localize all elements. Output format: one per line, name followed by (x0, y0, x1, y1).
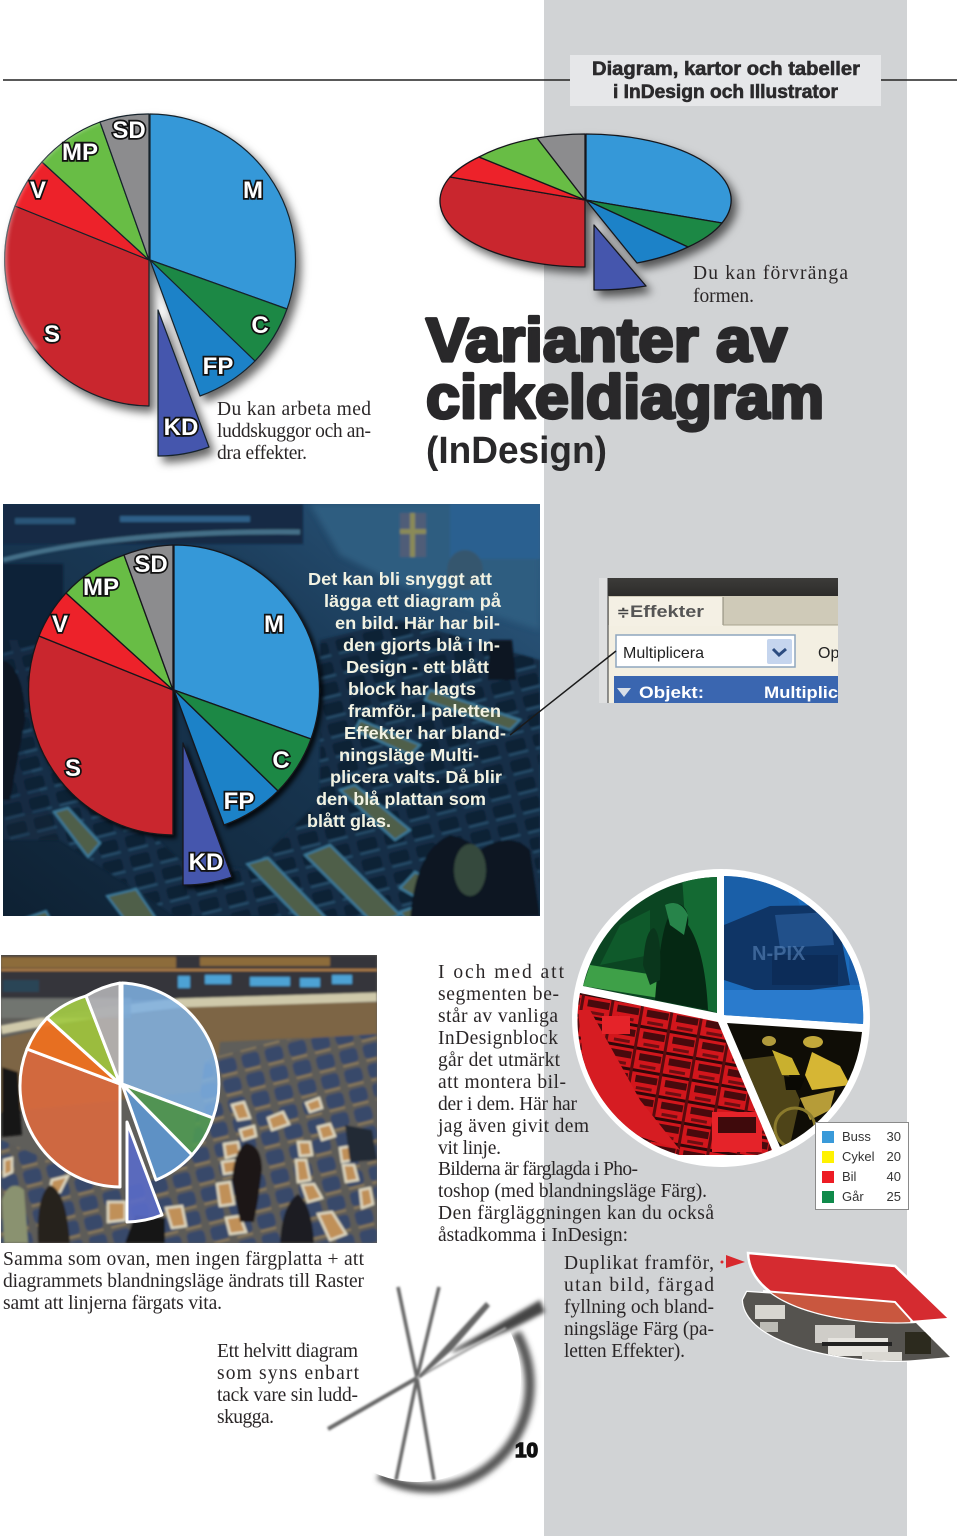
effects palette screenshot: Multiplic (764, 683, 838, 702)
text on photo: en bild. Här har bil- (335, 613, 500, 633)
leader line (510, 651, 616, 735)
main title: (InDesign) (426, 430, 607, 472)
text on photo: block har lagts (348, 679, 476, 699)
text on photo: den gjorts blå i In- (343, 635, 500, 655)
pie labels: C (251, 312, 269, 339)
text on photo (307, 569, 506, 831)
effects palette screenshot: Objekt: (639, 683, 704, 702)
body text: segments: toshop (med blandningsläge Färg). (438, 1181, 707, 1202)
header box: i InDesign och Illustrator (613, 82, 839, 103)
text on photo: blått glas. (307, 811, 391, 831)
body text: segments: vit linje. (438, 1138, 501, 1159)
pie labels on photo: FP (224, 788, 254, 815)
exploded slice shadow (452, 1300, 545, 1353)
body text: duplicate (564, 1253, 714, 1362)
photo: seats (1, 1034, 377, 1243)
pie labels on photo: S (65, 755, 81, 782)
body text: segments: att montera bil- (438, 1072, 566, 1093)
segment: bicycle (727, 1023, 862, 1147)
text on photo: lägga ett diagram på (324, 591, 501, 611)
body text: segments: Bilderna är färglagda i Pho- (438, 1159, 638, 1180)
body text: duplicate: fyllning och bland- (564, 1297, 714, 1318)
body text: duplicate: Duplikat framför, (564, 1253, 714, 1274)
grey column (544, 0, 907, 1536)
body text: segments: Den färgläggningen kan du också (438, 1203, 714, 1224)
body text: segments: går det utmärkt (438, 1050, 561, 1071)
body text: segments: I och med att (438, 962, 565, 983)
pie labels on photo: V (52, 611, 68, 638)
body text: duplicate: ningsläge Färg (pa- (564, 1319, 714, 1340)
legend: bil: Bil (842, 1169, 857, 1184)
effects palette screenshot: Effekter (630, 602, 704, 621)
photo: ledge (1, 997, 377, 1030)
pie chart on photo (29, 545, 320, 885)
body text: segments (437, 962, 714, 1246)
pie labels on photo: KD (189, 849, 223, 876)
caption: shadows: dra effekter. (217, 443, 307, 464)
photo: people (2, 1067, 377, 1243)
legend: cykel: Cykel (842, 1149, 875, 1164)
photo: desks (4, 1098, 373, 1240)
main title (426, 306, 824, 472)
caption: shadows (217, 399, 371, 464)
legend (816, 1122, 908, 1210)
body text: segments: der i dem. Här har (438, 1094, 578, 1115)
legend: buss (822, 1129, 901, 1144)
photo: balcony band (1, 955, 377, 1000)
legend: bil (822, 1169, 901, 1184)
body text: segments: InDesignblock (438, 1028, 558, 1049)
header box: Diagram, kartor och tabeller (592, 59, 861, 80)
segment: pedestrian (580, 875, 720, 1017)
body text: segments: åstadkomma i InDesign: (438, 1225, 628, 1246)
caption: shadows: luddskuggor och an- (217, 421, 371, 442)
body text: segments: segmenten be- (438, 984, 559, 1005)
body text: segments: står av vanliga (438, 1006, 558, 1027)
white disc (313, 1274, 521, 1482)
legend: buss: Buss (842, 1129, 871, 1144)
photo panel: parliament with raster pie (1, 955, 377, 1243)
photo pie with white border (570, 869, 870, 1167)
legend: går (822, 1189, 901, 1204)
caption: distort (693, 263, 848, 307)
pie labels on photo: M (264, 611, 284, 638)
text on photo: Effekter har bland- (344, 723, 506, 743)
header box (570, 55, 881, 106)
text on photo: ningsläge Multi- (339, 745, 479, 765)
pie labels on photo (52, 551, 290, 876)
pie chart with soft shadow (4, 114, 295, 456)
pie labels: SD (112, 117, 146, 144)
segment: bus: N-PIX (752, 943, 806, 965)
caption: all white pie: skugga. (217, 1407, 274, 1428)
text on photo: framför. I paletten (348, 701, 501, 721)
text on photo: Design - ett blått (346, 657, 489, 677)
caption: shadows: Du kan arbeta med (217, 399, 371, 420)
photo panel: blue tinted parliament (3, 504, 540, 940)
caption: distort: Du kan förvränga (693, 263, 848, 284)
pie labels: S (44, 321, 60, 348)
solid red slice (748, 1253, 950, 1325)
caption: raster: diagrammets blandningsläge ändrats till Raster (3, 1271, 364, 1292)
effects palette screenshot: Multiplicera (623, 645, 704, 662)
rim highlight (4, 120, 100, 350)
legend: går: Går (842, 1189, 864, 1204)
photo: desks (14, 690, 520, 940)
photo: people (3, 640, 540, 920)
photo: seating rows (3, 620, 540, 916)
photo: wall and flag (310, 504, 540, 630)
raster pie segments (20, 983, 219, 1222)
photo: balcony (3, 504, 303, 814)
pie labels on photo: MP (83, 574, 119, 601)
caption: raster (3, 1249, 365, 1314)
main title: cirkeldiagram (426, 363, 824, 431)
gap shadows (328, 1287, 506, 1480)
effects palette screenshot: Op (818, 645, 839, 662)
caption: raster: Samma som ovan, men ingen färgplatta + att (3, 1249, 365, 1270)
caption: all white pie: tack vare sin ludd- (217, 1385, 358, 1406)
text on photo: plicera valts. Då blir (330, 767, 502, 787)
legend: cykel (822, 1149, 901, 1164)
body text: duplicate: letten Effekter). (564, 1341, 685, 1362)
main title: Varianter av (426, 306, 787, 374)
arrow marker (720, 1255, 745, 1268)
legend: går: 25 (887, 1189, 901, 1204)
effects palette screenshot (599, 578, 839, 703)
caption: all white pie (217, 1341, 360, 1428)
pie labels: KD (164, 414, 198, 441)
text on photo: den blå plattan som (316, 789, 486, 809)
pie labels: MP (62, 139, 98, 166)
text on photo: Det kan bli snyggt att (308, 569, 492, 589)
header rule (3, 79, 957, 81)
segment: bus (724, 876, 864, 1024)
pie labels on photo: SD (134, 551, 168, 578)
legend: cykel: 20 (887, 1149, 901, 1164)
body text: duplicate: utan bild, färgad (564, 1275, 714, 1296)
legend: buss: 30 (887, 1129, 901, 1144)
pie labels on photo: C (272, 747, 290, 774)
body text: segments: jag även givit dem (437, 1116, 589, 1137)
caption: raster: samt att linjerna färgats vita. (3, 1293, 222, 1314)
outer shadow (379, 1333, 530, 1488)
caption: distort: formen. (693, 286, 754, 307)
pie labels: V (30, 177, 46, 204)
pie labels: FP (203, 353, 233, 380)
pie labels: M (243, 177, 263, 204)
caption: all white pie: som syns enbart (217, 1363, 360, 1384)
caption: all white pie: Ett helvitt diagram (217, 1341, 358, 1362)
pie labels (30, 117, 269, 441)
all white pie with shadow only (313, 1274, 545, 1488)
page number: 10 (515, 1440, 538, 1462)
exploded slice example (740, 1253, 955, 1365)
distorted elliptical pie (440, 134, 731, 290)
segment: cars (577, 993, 772, 1155)
kd gap shadow (419, 1302, 490, 1378)
photo: back wall (1, 1002, 377, 1112)
photo slice (742, 1290, 950, 1362)
effects palette screenshot: ≑ (617, 604, 630, 621)
legend: bil: 40 (887, 1169, 901, 1184)
